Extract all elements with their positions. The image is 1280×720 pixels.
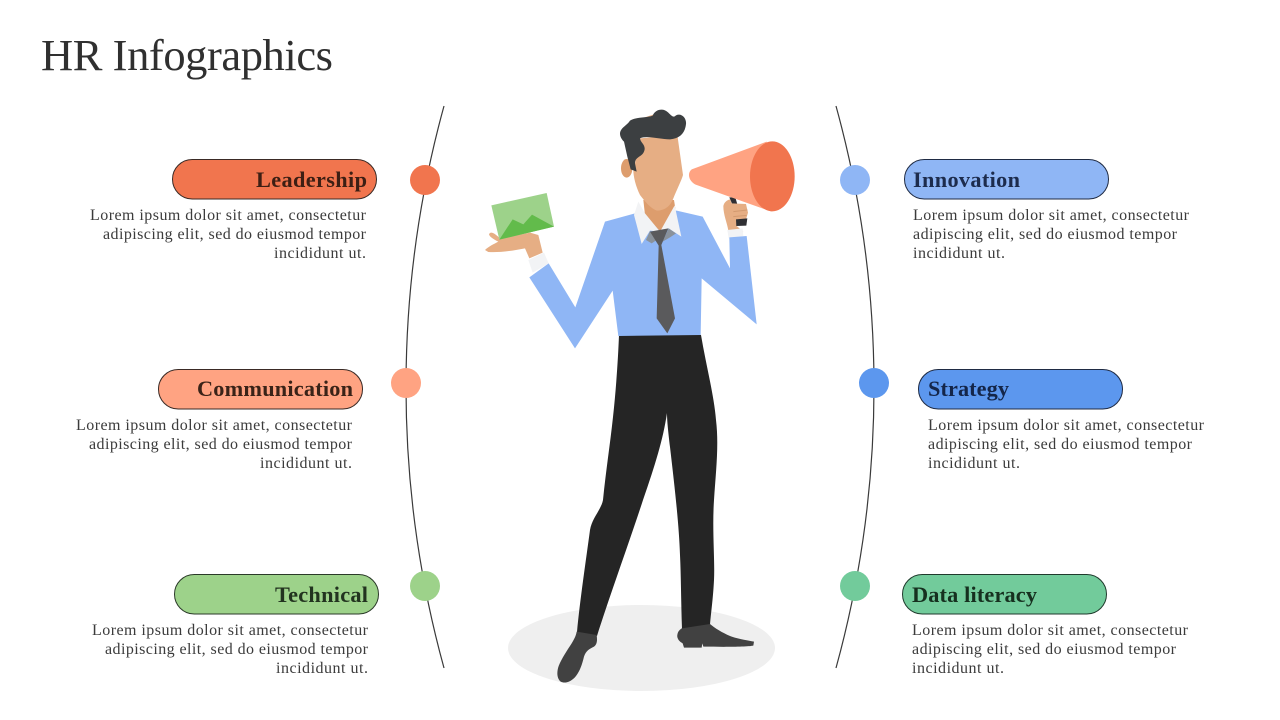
strategy description: Lorem ipsum dolor sit amet, consectetur xyxy=(928,417,1205,434)
left shoe xyxy=(557,632,597,683)
strategy heading: Strategy xyxy=(928,376,1009,401)
panel: technical xyxy=(92,571,440,677)
panel: strategy xyxy=(859,368,1205,472)
megaphone mouth xyxy=(750,141,795,211)
strategy dot xyxy=(859,368,889,398)
communication description: Lorem ipsum dolor sit amet, consectetur xyxy=(76,417,353,434)
communication heading: Communication xyxy=(197,376,354,401)
neck xyxy=(643,200,675,232)
data literacy heading: Data literacy xyxy=(912,582,1037,607)
trousers xyxy=(577,335,717,636)
ear xyxy=(621,159,632,178)
strategy description: incididunt ut. xyxy=(928,455,1020,472)
hair xyxy=(620,110,686,172)
technical description: adipiscing elit, sed do eiusmod tempor xyxy=(105,641,369,658)
innovation description: incididunt ut. xyxy=(913,245,1005,262)
ground shadow xyxy=(508,605,775,691)
communication pill xyxy=(158,370,362,409)
forehead scalp xyxy=(642,114,657,130)
tie shadow xyxy=(646,228,676,243)
data literacy dot xyxy=(840,571,870,601)
innovation dot xyxy=(840,165,870,195)
strategy description xyxy=(928,417,1205,472)
communication description: adipiscing elit, sed do eiusmod tempor xyxy=(89,436,353,453)
innovation description: adipiscing elit, sed do eiusmod tempor xyxy=(913,226,1178,243)
hand grip bottom xyxy=(736,218,747,226)
technical description: Lorem ipsum dolor sit amet, consectetur xyxy=(92,622,369,639)
finger lines xyxy=(733,210,747,217)
right shoe xyxy=(677,624,754,648)
innovation description: Lorem ipsum dolor sit amet, consectetur xyxy=(913,207,1190,224)
communication description xyxy=(76,417,353,472)
holding hand xyxy=(485,233,543,258)
left arc xyxy=(406,106,444,668)
right arc xyxy=(836,106,874,668)
data literacy pill xyxy=(902,574,1106,614)
technical description xyxy=(92,622,369,677)
shirt xyxy=(529,211,757,348)
leadership description: incididunt ut. xyxy=(274,245,366,262)
panel: leadership xyxy=(90,160,440,262)
photo card xyxy=(491,193,554,240)
communication description: incididunt ut. xyxy=(260,455,352,472)
strategy pill xyxy=(918,370,1122,409)
leadership description: Lorem ipsum dolor sit amet, consectetur xyxy=(90,207,367,224)
leadership description xyxy=(90,207,367,262)
megaphone handle xyxy=(729,197,738,207)
technical dot xyxy=(410,571,440,601)
data literacy description: Lorem ipsum dolor sit amet, consectetur xyxy=(912,622,1189,639)
leadership heading: Leadership xyxy=(256,167,367,192)
figure: man with megaphone xyxy=(485,110,795,683)
panel: data literacy xyxy=(840,571,1189,677)
strategy description: adipiscing elit, sed do eiusmod tempor xyxy=(928,436,1193,453)
innovation description xyxy=(913,207,1190,262)
panel: communication xyxy=(76,368,421,472)
data literacy description: adipiscing elit, sed do eiusmod tempor xyxy=(912,641,1177,658)
upper body xyxy=(485,110,795,348)
raised hand xyxy=(723,199,748,232)
data literacy description: incididunt ut. xyxy=(912,660,1004,677)
face xyxy=(633,135,683,211)
photo mountains xyxy=(499,215,554,240)
innovation pill xyxy=(904,160,1108,199)
title: HR Infographics xyxy=(41,30,333,80)
communication dot xyxy=(391,368,421,398)
leadership description: adipiscing elit, sed do eiusmod tempor xyxy=(103,226,367,243)
leadership pill xyxy=(172,160,376,199)
technical pill xyxy=(174,574,378,614)
megaphone cone xyxy=(689,142,772,212)
tie xyxy=(650,228,675,333)
technical heading: Technical xyxy=(275,582,368,607)
shoes xyxy=(557,624,754,683)
data literacy description xyxy=(912,622,1189,677)
collar xyxy=(634,202,681,244)
panel: innovation xyxy=(840,160,1190,262)
raised arm cuff xyxy=(727,228,743,238)
technical description: incididunt ut. xyxy=(276,660,368,677)
leadership dot xyxy=(410,165,440,195)
white cuff xyxy=(528,253,549,273)
innovation heading: Innovation xyxy=(913,167,1021,192)
